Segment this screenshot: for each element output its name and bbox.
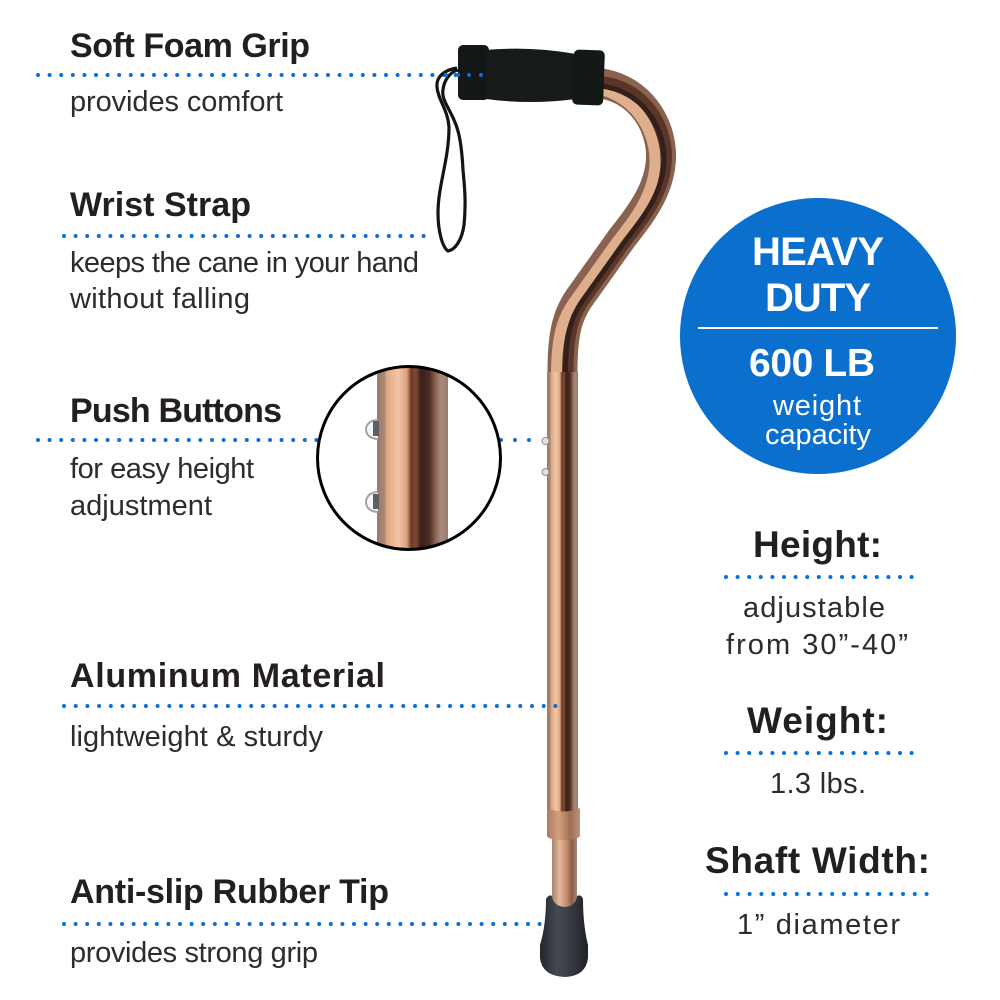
spec: shaft width: Shaft Width: xyxy=(705,840,930,881)
badge: heavy duty: weight xyxy=(772,390,861,422)
badge: heavy duty: 600 LB xyxy=(749,342,875,385)
label: push buttons: for easy height xyxy=(70,453,254,485)
cane handle bend xyxy=(556,83,664,380)
label: wrist strap: without falling xyxy=(69,283,250,315)
rubber tip xyxy=(540,895,588,977)
spec: weight: Weight: xyxy=(747,700,888,741)
dotted leader: aluminum material xyxy=(64,704,556,708)
label: aluminum material: Aluminum Material xyxy=(70,657,385,695)
cane illustration xyxy=(437,45,664,977)
wrist strap xyxy=(437,68,465,251)
label: anti-slip rubber tip: Anti-slip Rubber Tip xyxy=(70,873,389,911)
magnified shaft xyxy=(377,360,448,560)
spec: height: from 30”-40” xyxy=(726,629,908,661)
label: push buttons xyxy=(70,392,282,522)
label: aluminum material: lightweight & sturdy xyxy=(70,721,324,753)
label: wrist strap: keeps the cane in your hand xyxy=(70,247,419,279)
dotted leader: wrist strap xyxy=(64,234,428,238)
magnifier circle xyxy=(318,360,500,560)
label: anti-slip rubber tip: provides strong grip xyxy=(70,937,318,969)
label: soft foam grip: Soft Foam Grip xyxy=(70,27,310,65)
spec: shaft width: 1” diameter xyxy=(737,909,900,941)
spec: height: Height: xyxy=(753,524,882,565)
label: soft foam grip: provides comfort xyxy=(70,86,283,118)
badge: heavy duty: HEAVY xyxy=(752,230,884,274)
spec: weight: 1.3 lbs. xyxy=(770,768,866,800)
adjustment collar xyxy=(547,808,580,840)
label: wrist strap xyxy=(69,186,419,315)
label: soft foam grip xyxy=(70,27,310,118)
spec: height: adjustable xyxy=(743,592,885,624)
foam grip xyxy=(458,45,605,106)
spec: height xyxy=(726,524,912,661)
badge: heavy duty xyxy=(680,198,956,474)
spec: shaft width xyxy=(705,840,930,941)
label: anti-slip rubber tip xyxy=(70,873,389,969)
dotted leader: rubber tip xyxy=(64,922,541,926)
label: aluminum material xyxy=(70,657,385,753)
dotted leader: push buttons xyxy=(38,438,530,442)
small push buttons xyxy=(542,438,549,476)
lower tube xyxy=(552,838,577,908)
magnified push buttons xyxy=(366,420,379,512)
label: wrist strap: Wrist Strap xyxy=(70,186,251,224)
badge: heavy duty: capacity xyxy=(765,419,872,451)
cane shaft xyxy=(547,372,578,812)
label: push buttons: Push Buttons xyxy=(70,392,282,430)
badge: heavy duty: DUTY xyxy=(765,276,871,320)
grip leader dots over foam xyxy=(444,73,483,77)
dotted leader: soft foam grip xyxy=(38,73,482,77)
label: push buttons: adjustment xyxy=(70,490,212,522)
spec: weight xyxy=(726,700,912,800)
